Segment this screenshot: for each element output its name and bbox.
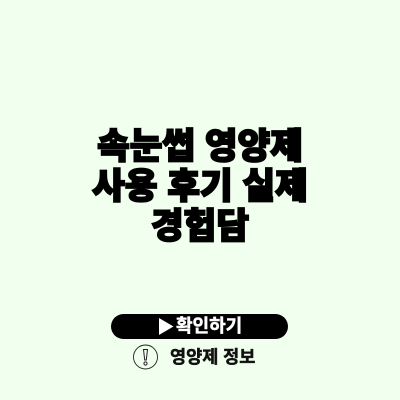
icon: play triangle: [159, 318, 174, 335]
button: confirm: [111, 314, 288, 339]
label: nutrient info: 영양제 정보: [170, 347, 255, 367]
title: 속눈썹 영양제: [97, 126, 303, 166]
button label: 확인하기: [176, 316, 242, 336]
title: 경험담: [151, 206, 249, 246]
title: 사용 후기 실제: [92, 166, 308, 206]
title: [91, 126, 308, 246]
icon: exclamation circle: [133, 344, 158, 370]
